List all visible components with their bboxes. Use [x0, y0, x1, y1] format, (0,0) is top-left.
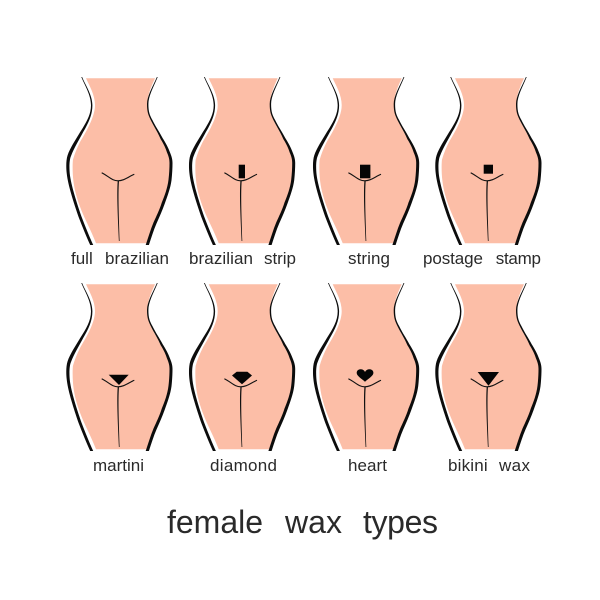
label: bikini wax: wax: [498, 456, 530, 475]
label: full brazilian: brazilian: [105, 249, 169, 268]
label: heart: heart: [348, 456, 387, 475]
figure: brazilian strip: [189, 77, 295, 245]
label: bikini wax: bikini: [448, 456, 488, 475]
label: brazilian strip: strip: [264, 249, 296, 268]
label: postage stamp: postage: [423, 249, 483, 268]
label: diamond: diamond: [210, 456, 277, 475]
figure: string: [313, 77, 419, 245]
label: martini: martini: [93, 456, 144, 475]
label: full brazilian: [71, 249, 169, 268]
label: bikini wax: [448, 456, 530, 475]
label: full brazilian: full: [71, 249, 93, 268]
figure: diamond: [189, 283, 295, 451]
label: string: string: [348, 249, 390, 268]
title: wax: [284, 504, 342, 540]
figure: bikini wax: [435, 283, 542, 451]
label: brazilian strip: brazilian: [189, 249, 253, 268]
title: types: [363, 504, 438, 540]
title: [167, 504, 438, 540]
label: brazilian strip: [189, 249, 296, 268]
figure: full brazilian: [66, 77, 172, 245]
figure: heart: [313, 283, 419, 451]
label: postage stamp: stamp: [496, 249, 541, 268]
title: female: [167, 504, 263, 540]
figure: postage stamp: [435, 77, 542, 245]
figure: martini: [66, 283, 172, 451]
label: postage stamp: [423, 249, 541, 268]
